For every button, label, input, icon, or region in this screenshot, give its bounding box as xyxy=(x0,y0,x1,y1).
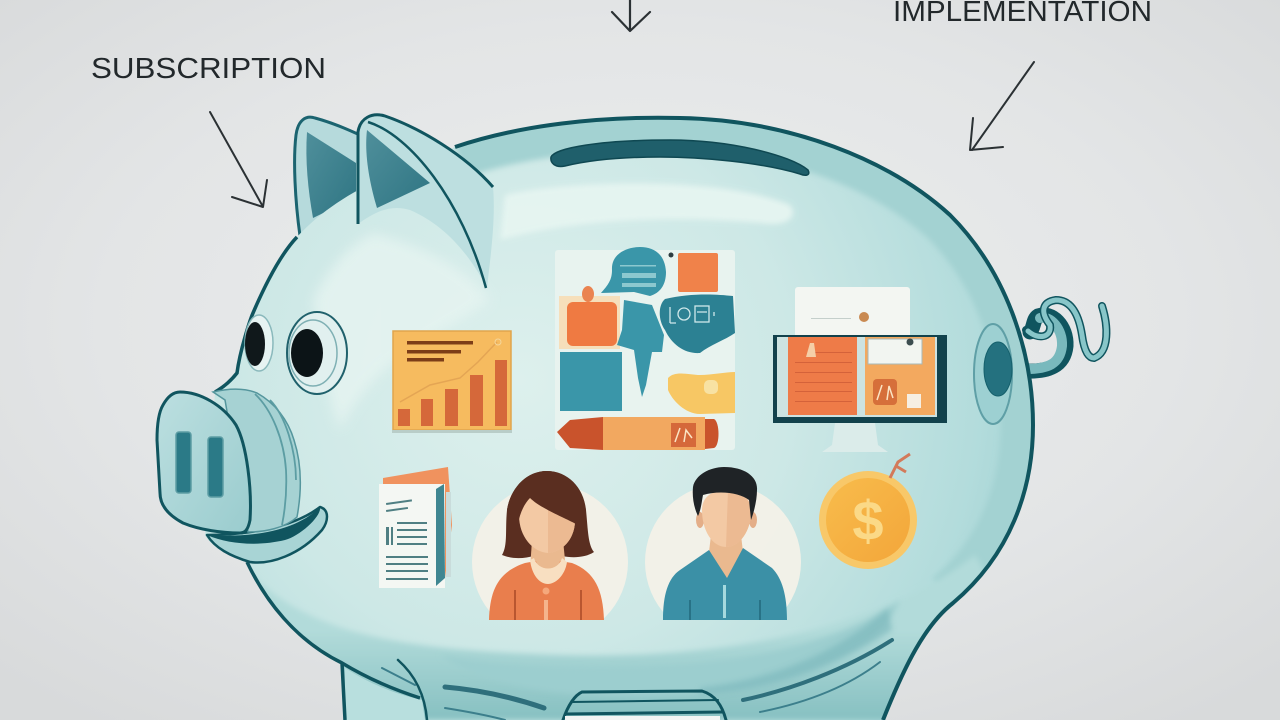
orange page xyxy=(788,337,857,415)
arrow: implementation xyxy=(970,62,1034,150)
left leg light xyxy=(345,668,425,720)
icon: far eye xyxy=(245,315,273,371)
ears xyxy=(696,512,704,528)
icon: man avatar xyxy=(645,467,801,620)
teal bubble with symbols xyxy=(660,294,735,353)
icon: dollar coin xyxy=(819,454,917,569)
orange note xyxy=(678,253,718,292)
icon: near eye xyxy=(287,312,347,394)
coin slot xyxy=(551,140,809,175)
teal square xyxy=(560,352,622,411)
icon: dollar coin: $ xyxy=(852,489,884,552)
crayon xyxy=(557,417,718,450)
hair xyxy=(693,467,757,520)
face xyxy=(702,490,751,547)
icon: document folder on monitor xyxy=(773,287,947,452)
back hair xyxy=(502,471,594,558)
dark frame xyxy=(773,335,947,423)
neck xyxy=(709,535,743,580)
icon: collage of speech bubbles and notes xyxy=(555,247,735,450)
near ear xyxy=(358,115,494,288)
white paper xyxy=(795,287,910,339)
shirt xyxy=(663,548,787,620)
orange card with tab xyxy=(559,286,620,349)
icon: document with orange top xyxy=(379,467,452,588)
side button xyxy=(974,324,1012,424)
label: subscription: SUBSCRIPTION xyxy=(91,53,326,85)
far ear xyxy=(295,117,362,236)
icon: bar chart card xyxy=(392,331,512,433)
neck xyxy=(530,540,566,570)
face xyxy=(519,490,575,553)
yellow shape xyxy=(668,372,735,414)
body glass shading xyxy=(240,118,1033,720)
body outline xyxy=(455,118,1033,720)
pig body xyxy=(205,118,1033,720)
gap between front legs xyxy=(565,716,720,720)
icon: left nostril xyxy=(176,432,191,493)
amber page xyxy=(865,337,935,415)
collar xyxy=(530,558,567,584)
speech bubble xyxy=(601,247,666,296)
icon: woman avatar xyxy=(472,471,628,620)
monitor stand xyxy=(822,423,888,452)
arrow: top centre xyxy=(612,0,650,31)
shirt xyxy=(489,561,604,620)
icon: right nostril xyxy=(208,437,223,497)
fringe xyxy=(507,471,586,524)
belly and leg details xyxy=(382,640,892,720)
snout and mouth xyxy=(157,389,327,563)
arrow: subscription xyxy=(210,112,267,207)
teal pointer shape xyxy=(617,300,664,397)
white note xyxy=(868,339,922,364)
icon: curly tail xyxy=(1026,300,1106,371)
